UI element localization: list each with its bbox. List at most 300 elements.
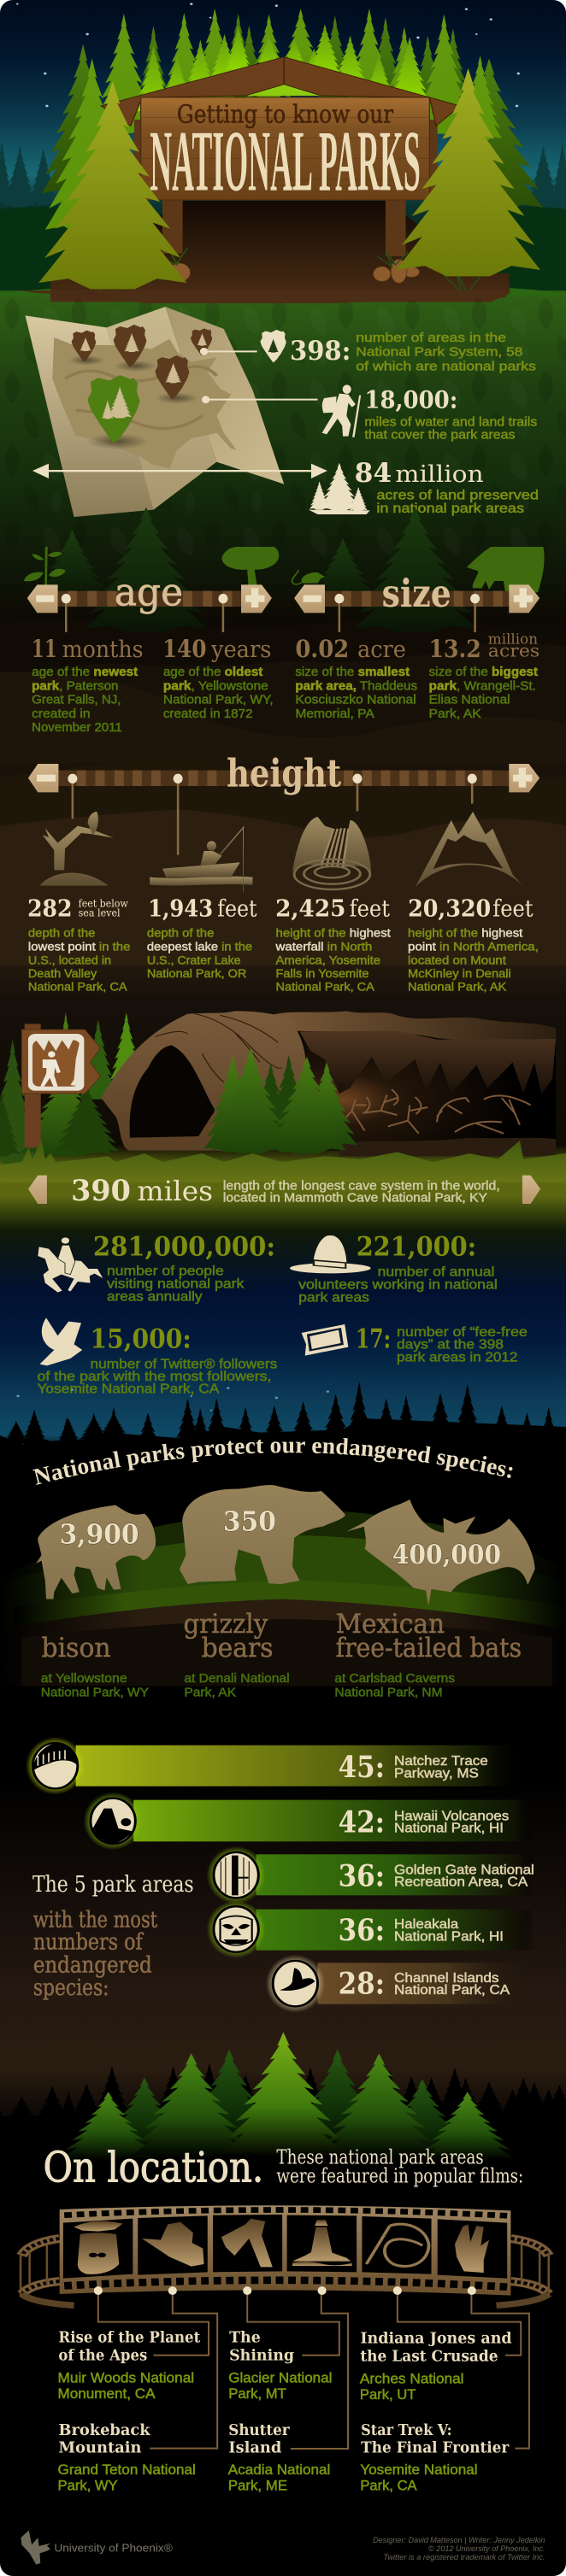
- film: Star Trek V: Park, CA: [360, 2479, 417, 2494]
- credits: [373, 2537, 545, 2562]
- stat: 0.02 acre: 0.02: [295, 635, 349, 663]
- label: Mexican free-tailed bats: [336, 1610, 522, 1664]
- icon: horse rider: [38, 1237, 103, 1293]
- film strip: [60, 2205, 510, 2296]
- location: bison: National Park, WY: [41, 1686, 149, 1699]
- text: highest waterfall: National Park, CA: [276, 981, 374, 994]
- row 2: [84, 1792, 534, 1850]
- text: biggest park: size of the biggest: [429, 665, 538, 679]
- stat: 13.2 million acres: 13.2: [429, 635, 481, 663]
- stat: 0.02 acre: acre: [357, 637, 406, 663]
- map sheets: [26, 315, 153, 517]
- film: Indiana Jones and the Last Crusade: Indiana Jones and: [360, 2329, 512, 2347]
- film: The Shining: The: [229, 2328, 261, 2346]
- film: Rise of the Planet of the Apes: Monument, CA: [58, 2386, 156, 2402]
- plus tag: [509, 764, 539, 792]
- film: Shutter Island: Acadia National: [228, 2462, 330, 2478]
- icon: lighthouse: [292, 2220, 352, 2266]
- heading: the 5 park areas: The 5 park areas: [32, 1870, 194, 1897]
- stat text: visitors: visiting national park: [107, 1276, 245, 1291]
- minus tag: [294, 584, 325, 613]
- hills: [0, 758, 566, 965]
- row 4: [206, 1900, 534, 1958]
- sub heading: [33, 1906, 157, 2000]
- text: highest waterfall: height of the highest: [276, 927, 391, 940]
- connector lines: [98, 2291, 529, 2449]
- text: highest point: National Park, AK: [408, 981, 507, 994]
- stat text: fee-free days: park areas in 2012: [397, 1350, 517, 1364]
- text: oldest park: National Park, WY,: [163, 693, 274, 707]
- location: bats: at Carlsbad Caverns: [334, 1671, 455, 1686]
- location: bison: at Yellowstone: [41, 1671, 127, 1686]
- icon: tree: [221, 547, 279, 585]
- film: Shutter Island: Park, ME: [228, 2479, 287, 2494]
- dirt path: [50, 201, 510, 302]
- stat: 282: feet below: [79, 898, 128, 910]
- minus tag: [28, 764, 58, 792]
- film: Rise of the Planet of the Apes: Muir Woods National: [58, 2370, 194, 2386]
- name: [394, 1970, 510, 1998]
- icon: cowboy hat: [142, 2222, 204, 2267]
- label: bison: bison: [42, 1634, 111, 1664]
- stat: 13.2 million acres: million: [488, 631, 538, 648]
- text: smallest park: Memorial, PA: [295, 707, 375, 721]
- icon: boat and fisherman: [150, 826, 253, 893]
- cave rock: [101, 1011, 306, 1151]
- film: The Shining: Shining: [229, 2346, 294, 2364]
- roof: [101, 57, 460, 126]
- stat: 11 months: 11: [32, 635, 57, 663]
- stat text: 84 million: [376, 487, 539, 516]
- bar: [318, 1963, 534, 2004]
- label: Mexican free-tailed bats: Mexican: [336, 1610, 445, 1640]
- black tree line: [3, 1382, 565, 1470]
- name: National Park, CA: [394, 1982, 510, 1998]
- film: Rise of the Planet of the Apes: Rise of the Planet: [58, 2328, 201, 2346]
- icon: elephant: [467, 547, 545, 592]
- plus tag: [509, 584, 539, 613]
- heading: age: age: [115, 570, 183, 615]
- silhouette pines: [36, 507, 476, 632]
- text: deepest lake: depth of the: [147, 927, 214, 940]
- stat text: volunteers: [298, 1265, 498, 1305]
- film: Rise of the Planet of the Apes: [58, 2328, 201, 2402]
- stat text: 398: [356, 331, 536, 373]
- film: Indiana Jones and the Last Crusade: Arches National: [360, 2371, 464, 2387]
- stalactites: [299, 1031, 556, 1094]
- park map: [26, 307, 284, 517]
- text: smallest park: size of the smallest: [295, 665, 410, 679]
- icon: axe: [221, 2219, 273, 2267]
- medallion: seal: [266, 1955, 325, 2013]
- green pines: [62, 2032, 515, 2162]
- stat text: 18,000: miles of water and land trails: [364, 414, 537, 429]
- text: newest park: age of the newest: [32, 665, 139, 679]
- sign plate: [21, 1030, 100, 1094]
- name: Hawaii Volcanoes: [394, 1808, 509, 1823]
- name: Natchez Trace: [394, 1753, 488, 1769]
- text: highest point: height of the highest: [408, 927, 523, 940]
- icon: whip: [367, 2224, 429, 2266]
- location: bears: at Denali National: [184, 1671, 290, 1686]
- film: Indiana Jones and the Last Crusade: Park, UT: [360, 2387, 416, 2403]
- row 1: [26, 1737, 523, 1795]
- stat text: 18,000: that cover the park areas: [364, 427, 515, 442]
- far tree line: [0, 141, 566, 211]
- bar: [133, 1800, 534, 1841]
- value: 36:: [339, 1859, 385, 1893]
- stat: 2,425 feet: feet: [350, 896, 390, 923]
- stat: 20,320 feet: feet: [492, 896, 534, 923]
- animal: bat: [346, 1499, 535, 1605]
- icon: seedling: [24, 547, 66, 585]
- name: Recreation Area, CA: [394, 1875, 528, 1889]
- count: bison: 3,900: [60, 1518, 139, 1551]
- text: smallest park: Kosciuszko National: [295, 693, 416, 707]
- stat text: 398: of which are national parks: [356, 359, 536, 373]
- name: National Park, HI: [394, 1929, 504, 1944]
- text: oldest park: park, Yellowstone: [163, 678, 268, 693]
- rock ledge top: [271, 1011, 556, 1040]
- section: cave scene: [0, 1011, 566, 1182]
- name: [394, 1753, 488, 1781]
- front pines: [204, 1048, 357, 1153]
- marker shadows: [68, 355, 198, 449]
- text: highest point: [408, 927, 539, 994]
- stat text: longest cave: length of the longest cave system in the world,: [223, 1179, 500, 1193]
- cave wall interior: [296, 1030, 556, 1151]
- stat text: volunteers: number of annual: [378, 1265, 494, 1279]
- stat text: longest cave: [223, 1179, 500, 1205]
- pine cones: [155, 259, 420, 283]
- section: endangered species: [0, 1410, 566, 1699]
- markers: [62, 594, 480, 632]
- stat text: twitter: of the park with the most followers,: [37, 1369, 271, 1384]
- cave floor ledge: [339, 1138, 556, 1156]
- sprocket holes: [64, 2209, 507, 2215]
- sub heading: with the most: [33, 1906, 157, 1932]
- logo: phoenix: [21, 2531, 50, 2565]
- icon: trees: [309, 463, 370, 514]
- black tree line: [0, 2063, 566, 2239]
- stat: 13.2 million acres: [429, 631, 539, 663]
- icon: ranger hat: [290, 1235, 371, 1273]
- count: bears: 350: [223, 1505, 276, 1538]
- icon: mountain: [416, 812, 525, 889]
- stat text: fee-free days: [397, 1324, 528, 1364]
- name: Parkway, MS: [394, 1766, 479, 1781]
- big foreground pines: [38, 68, 540, 289]
- stat text: volunteers: park areas: [298, 1289, 369, 1305]
- side dark pines: [42, 44, 543, 235]
- value: 42:: [339, 1805, 385, 1840]
- ground edge: [21, 290, 510, 303]
- row 3: [206, 1846, 534, 1904]
- sub heading: endangered: [33, 1951, 152, 1977]
- stat text: 84 million: acres of land preserved: [376, 487, 539, 502]
- stat text: visitors: [107, 1264, 245, 1304]
- text: newest park: [32, 665, 139, 735]
- film: Star Trek V: Star Trek V:: [361, 2421, 452, 2438]
- film: Rise of the Planet of the Apes: of the Apes: [58, 2346, 147, 2364]
- text: highest waterfall: Falls in Yosemite: [276, 968, 369, 981]
- plus tag: [241, 584, 272, 613]
- stat: 11 months: months: [62, 637, 144, 663]
- text: oldest park: created in 1872: [163, 707, 253, 721]
- icon: mouse: [292, 570, 325, 584]
- film: The Shining: [228, 2328, 332, 2402]
- connector dots: [94, 2286, 476, 2295]
- side reels: [21, 2239, 549, 2305]
- sub heading: numbers of: [33, 1928, 144, 1955]
- park sign: [21, 1024, 100, 1147]
- stat: 17: 17:: [356, 1323, 391, 1354]
- stat text: visitors: number of people: [107, 1264, 224, 1278]
- stat: 140 years: [162, 635, 271, 663]
- stat: 18,000: 18,000:: [364, 385, 457, 414]
- minus tag: [27, 584, 58, 613]
- film: Brokeback Mountain: Brokeback: [58, 2421, 151, 2438]
- stat: 140 years: 140: [162, 635, 206, 663]
- stat text: visitors: areas annually: [107, 1288, 203, 1304]
- stat text: 398: number of areas in the: [356, 331, 506, 345]
- icon: waterfall: [292, 817, 371, 889]
- text: lowest point: U.S., located in: [28, 954, 111, 967]
- text: newest park: created in: [32, 707, 91, 721]
- section: height: [0, 751, 566, 994]
- medallion: volcano: [84, 1792, 143, 1850]
- stat: 390 miles: [71, 1174, 213, 1208]
- section: age and size: [0, 507, 566, 763]
- university name: University of Phoenix®: [54, 2542, 173, 2555]
- text: smallest park: park area, Thaddeus: [295, 678, 417, 693]
- heading: height: height: [227, 751, 341, 796]
- text: deepest lake: U.S., Crater Lake: [147, 954, 241, 967]
- text: newest park: park, Paterson: [32, 678, 118, 693]
- count: bats: 400,000: [392, 1540, 501, 1570]
- icon: ticket: [302, 1324, 348, 1356]
- film: Indiana Jones and the Last Crusade: the Last Crusade: [360, 2347, 498, 2365]
- post: [25, 1024, 41, 1147]
- stat text: twitter: [37, 1357, 277, 1396]
- value: 45:: [339, 1750, 385, 1785]
- stat: 140 years: years: [210, 637, 271, 663]
- state lines: [65, 367, 216, 429]
- text: lowest point: [28, 927, 131, 994]
- stat: 282: sea level: [79, 907, 121, 919]
- text: newest park: November 2011: [32, 720, 122, 735]
- stat: 398: 398:: [290, 336, 351, 367]
- sub heading: species:: [33, 1974, 109, 2000]
- bar: [76, 1746, 523, 1787]
- label: grizzly bears: [183, 1610, 274, 1664]
- name: Haleakala: [394, 1916, 458, 1932]
- heading: size: size: [382, 572, 451, 616]
- markers: [72, 325, 212, 400]
- text: lowest point: Death Valley: [28, 968, 97, 981]
- scale bar: age: [27, 570, 272, 615]
- national parks wooden sign: [101, 57, 460, 256]
- animal: bear: [180, 1485, 345, 1584]
- hills: [0, 618, 566, 763]
- icon: dove: [39, 1317, 82, 1365]
- stars: [16, 3, 520, 107]
- label: grizzly bears: grizzly: [183, 1610, 268, 1640]
- film: The Shining: Park, MT: [228, 2386, 286, 2402]
- text: biggest park: Elias National: [429, 693, 510, 707]
- black forest mass: [0, 1410, 566, 1510]
- location: bats: [334, 1671, 455, 1699]
- location: bison: [41, 1671, 149, 1699]
- stat: 282: 282: [27, 895, 72, 923]
- text: newest park: Great Falls, NJ,: [32, 693, 121, 707]
- section: cave length banner: [3, 1174, 565, 1470]
- text: deepest lake: National Park, OR: [147, 968, 246, 981]
- grass strip: [0, 1139, 566, 1182]
- stat text: longest cave: located in Mammoth Cave National Park, KY: [223, 1191, 487, 1205]
- grass tufts: [91, 248, 484, 296]
- stat: 1,943 feet: 1,943: [148, 895, 213, 923]
- film: Shutter Island: [228, 2421, 330, 2494]
- location: bears: Park, AK: [184, 1686, 236, 1699]
- cave paintings: [343, 1089, 531, 1134]
- text: oldest park: age of the oldest: [163, 665, 263, 679]
- name: [394, 1808, 509, 1835]
- name: Golden Gate National: [394, 1862, 534, 1877]
- text: highest waterfall: [275, 927, 391, 994]
- stat text: volunteers: volunteers working in national: [298, 1276, 498, 1292]
- hills: [0, 207, 566, 296]
- stat: 2,425 feet: 2,425: [275, 895, 345, 923]
- left arrow tag: [28, 1176, 47, 1204]
- stat text: 398: National Park System, 58: [356, 345, 522, 359]
- stat: 282: [27, 895, 128, 923]
- section: map statistics: [0, 290, 566, 555]
- bar: [256, 1854, 534, 1895]
- text: deepest lake: deepest lake in the: [147, 941, 252, 954]
- text: highest point: point in North America,: [408, 941, 539, 954]
- stat: 0.02 acre: [295, 635, 406, 663]
- stat: 11 months: [32, 635, 144, 663]
- stat: 84 million: million: [395, 461, 484, 488]
- stat: 84 million: [355, 458, 484, 489]
- stat line connectors: [200, 348, 318, 403]
- name: National Park, HI: [394, 1821, 504, 1835]
- stat: 390 miles: 390: [71, 1174, 131, 1208]
- stat text: fee-free days: days” at the 398: [397, 1336, 504, 1352]
- text: highest point: McKinley in Denali: [408, 968, 511, 981]
- film: Indiana Jones and the Last Crusade: [360, 2329, 512, 2403]
- row 5: [266, 1955, 534, 2013]
- name: [394, 1862, 534, 1889]
- stars: [16, 1387, 329, 1411]
- text: biggest park: park, Wrangell-St.: [429, 678, 536, 693]
- medallion: tiki: [206, 1900, 266, 1958]
- US outline: [52, 337, 237, 468]
- stat: 84 million: 84: [355, 458, 392, 489]
- stat: 281,000,000: 281,000,000:: [93, 1231, 275, 1262]
- icon: hiker: [322, 384, 361, 437]
- sign posts: [134, 120, 438, 256]
- stat text: fee-free days: number of “fee-free: [397, 1324, 528, 1340]
- text: highest waterfall: waterfall in North: [275, 941, 372, 954]
- heading: on location: On location.: [44, 2145, 263, 2192]
- stat text: twitter: number of Twitter® followers: [91, 1357, 277, 1371]
- film: Star Trek V: [360, 2421, 510, 2494]
- stat: 13.2 million acres: acres: [488, 640, 539, 661]
- stat: 390 miles: miles: [137, 1175, 213, 1207]
- location: bears: [184, 1671, 290, 1699]
- bar: [256, 1910, 534, 1951]
- stat: 221,000: 221,000:: [357, 1231, 476, 1262]
- icon: dead tree and vulture: [39, 812, 114, 886]
- scale bar: size: [294, 572, 539, 616]
- cave symbol: [28, 1034, 84, 1091]
- text: highest waterfall: America, Yosemite: [276, 954, 380, 967]
- markers: [68, 774, 477, 855]
- film frames: [63, 2215, 507, 2279]
- stat: 15,000: 15,000:: [91, 1323, 192, 1354]
- film: Shutter Island: Shutter: [228, 2421, 290, 2438]
- section: hero: [0, 3, 566, 302]
- stat text: 84 million: in national park areas: [376, 501, 524, 516]
- name: Channel Islands: [394, 1970, 499, 1986]
- label: grizzly bears: bears: [202, 1634, 274, 1664]
- leaf pattern: [0, 299, 566, 555]
- name: [394, 1916, 504, 1944]
- animal: bison: [36, 1505, 156, 1599]
- marker trees: [80, 333, 207, 419]
- film: The Shining: Glacier National: [228, 2370, 332, 2386]
- stat: 20,320 feet: 20,320: [408, 895, 491, 923]
- hiker: [40, 1051, 61, 1087]
- film: Shutter Island: Island: [228, 2438, 281, 2456]
- text: lowest point: depth of the: [28, 927, 96, 940]
- film: Brokeback Mountain: Mountain: [58, 2438, 141, 2456]
- section: on location: [0, 2032, 566, 2239]
- cave mouth: [130, 1045, 215, 1138]
- right arrow tag: [522, 1176, 540, 1204]
- rock cracks: [156, 1014, 281, 1083]
- film: Star Trek V: Yosemite National: [360, 2462, 478, 2478]
- location: bats: National Park, NM: [334, 1686, 443, 1699]
- value: 28:: [339, 1967, 385, 2001]
- text: lowest point: lowest point in the: [28, 941, 131, 954]
- stat text: twitter: Yosemite National Park, CA: [37, 1382, 220, 1396]
- film: Brokeback Mountain: [58, 2421, 196, 2494]
- heading: endangered species: National parks protect our endangered species:: [32, 1438, 513, 1485]
- background pines: [0, 1012, 144, 1165]
- icon: ape: [74, 2221, 123, 2274]
- section: top five park areas: [26, 1737, 534, 2013]
- marker green: [87, 375, 140, 443]
- film reel: [21, 2205, 549, 2305]
- text: oldest park: [163, 665, 274, 721]
- text: lowest point: National Park, CA: [28, 981, 127, 994]
- stat: 1,943 feet: feet: [217, 896, 257, 923]
- icon: vulcan hand: [455, 2224, 489, 2273]
- icon: arrowhead: [260, 330, 286, 362]
- double arrow: [32, 464, 327, 478]
- text: deepest lake: [147, 927, 252, 981]
- text: biggest park: [429, 665, 538, 721]
- value: 36:: [339, 1913, 385, 1948]
- sign title small: Getting to know our: [177, 99, 393, 128]
- section: film locations: [21, 2286, 545, 2565]
- text: biggest park: Park, AK: [429, 707, 481, 721]
- back row of pines: [95, 9, 473, 134]
- intro text: [276, 2146, 523, 2187]
